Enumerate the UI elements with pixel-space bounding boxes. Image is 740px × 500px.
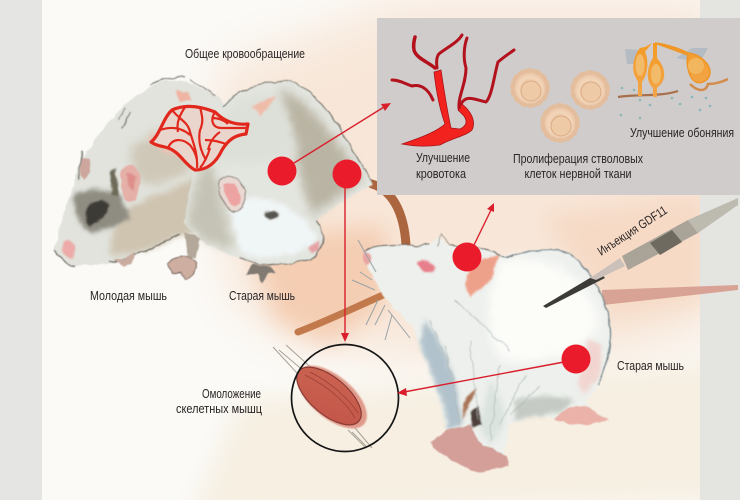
label: muscle rejuvenation: Омоложение — [202, 387, 261, 401]
arrow to panel — [268, 103, 391, 186]
heading: shared circulation: Общее кровообращение — [185, 47, 305, 61]
arrow to muscle from old mouse — [332, 160, 362, 342]
young mouse — [54, 77, 240, 268]
label: young mouse: Молодая мышь — [90, 289, 167, 303]
label: stem cell proliferation: клеток нервной ткани — [524, 167, 632, 181]
label: blood flow: Улучшение — [416, 151, 470, 165]
label: old treated mouse: Старая мышь — [617, 359, 684, 373]
old mouse, front — [168, 81, 372, 283]
tail of the old mouse, parabiosis pair — [372, 184, 406, 245]
parabiotic pair of mice — [54, 77, 372, 283]
label: injection: Инъекция GDF11 — [595, 203, 670, 259]
label: old mouse: Старая мышь — [229, 289, 295, 303]
magnifier ring — [292, 344, 398, 452]
label: muscle rejuvenation: скелетных мышц — [176, 402, 262, 416]
muscle inset — [273, 344, 398, 452]
tail stub of the treated mouse — [298, 292, 390, 332]
icon: shared circulation network — [151, 106, 248, 170]
icon: stem cell 2 — [572, 72, 608, 108]
panel: outcomes — [377, 18, 740, 195]
label: stem cell proliferation: Пролиферация стволовых — [513, 152, 644, 166]
icon: olfactory neurons — [618, 43, 728, 119]
syringe with GDF11 — [543, 198, 738, 308]
arrow to muscle from treated mouse — [397, 344, 590, 396]
icon: stem cell 3 — [542, 106, 578, 140]
hind foot — [553, 406, 608, 425]
front feet — [430, 425, 508, 472]
icon: blood vessels — [392, 35, 514, 146]
treated old mouse — [352, 234, 738, 472]
icon: stem cell 1 — [512, 70, 548, 106]
label: blood flow: кровотока — [416, 167, 466, 181]
arrow to panel from treated mouse — [452, 203, 494, 272]
